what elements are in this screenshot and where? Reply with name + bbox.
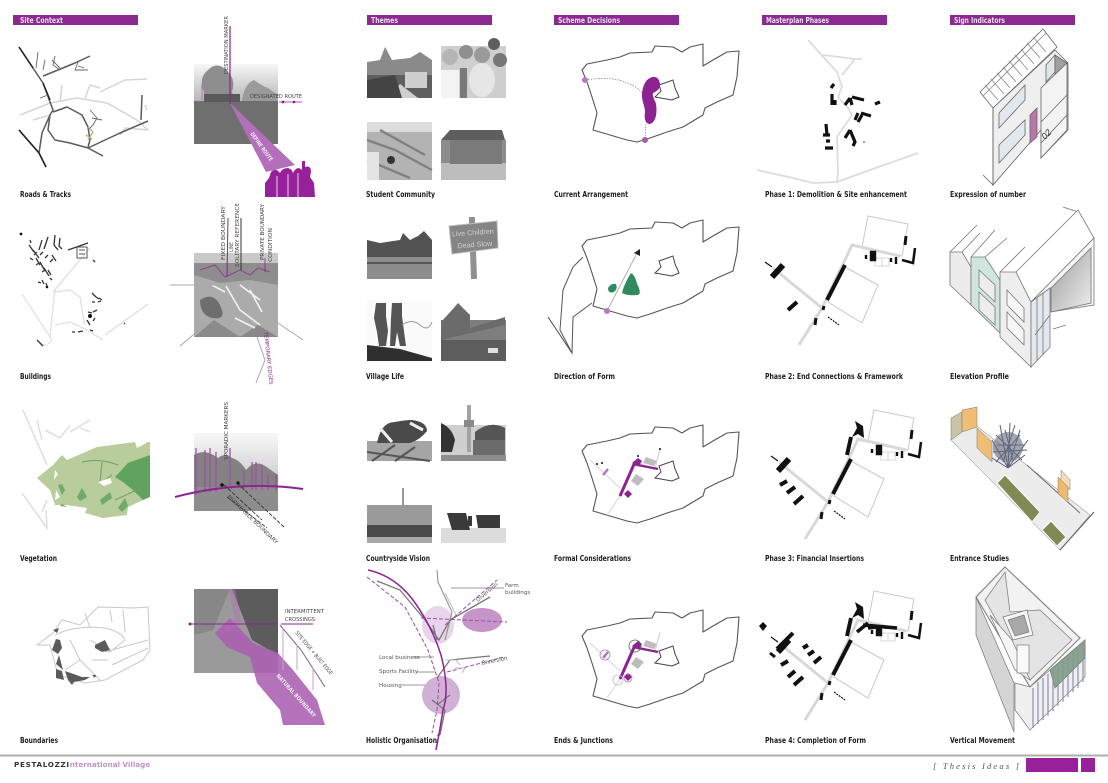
plan: phase 4 completion of form [759, 591, 921, 720]
diagram: direction of form [548, 220, 739, 353]
caption: elevation profile: Elevation Profile [950, 372, 1009, 381]
caption: boundaries: Boundaries [20, 736, 58, 745]
caption: buildings: Buildings [20, 372, 51, 381]
photo: festival crowd [367, 122, 432, 180]
map: vegetation [22, 410, 150, 528]
caption: holistic organisation: Holistic Organisation [366, 736, 437, 745]
isometric: expression of number [980, 29, 1068, 185]
photo: brick building [441, 130, 506, 180]
diagram: holistic organisation: Local business [379, 655, 420, 661]
photo: designated route with crowd: DESTINATION MARKER [224, 16, 230, 74]
icon: road sign Live Children Dead Slow: Dead Slow [457, 239, 493, 250]
photo: natural boundary and crossings [188, 589, 333, 725]
dotted paths [585, 78, 646, 140]
annotation lines [402, 588, 504, 685]
plan: phase 1 demolition and site enhancement [757, 40, 918, 183]
caption: entrance studies: Entrance Studies [950, 554, 1009, 563]
tree [992, 423, 1028, 468]
photo: smiling group [441, 38, 507, 98]
footer rule [0, 754, 1108, 756]
photo: designated route with crowd: DEFINE ROUTE [248, 132, 273, 163]
roof [980, 29, 1057, 108]
photo: aerial view with boundary annotations: SOLITARY REFERENCE [235, 203, 241, 267]
photo: aerial view with boundary annotations: TEMPORARY EDGES [262, 331, 274, 385]
photo: sporadic markers and permeable boundary: SPORADIC MARKERS [224, 402, 230, 460]
photo: natural boundary and crossings: NATURAL BOUNDARY [275, 673, 317, 720]
photo: sporadic markers and permeable boundary: PERMEABLE BOUNDARY [226, 494, 279, 546]
diagram: holistic organisation: Diversion [475, 582, 500, 604]
diagram: ends and junctions [582, 610, 739, 708]
marker line [229, 26, 231, 104]
photo: cattle [441, 513, 506, 543]
heading: Masterplan Phases: Masterplan Phases [766, 15, 829, 25]
diagram: current arrangement [582, 44, 739, 143]
photo: aerial view with boundary annotations [170, 203, 303, 385]
caption: ends and junctions: Ends & Junctions [554, 736, 613, 745]
heading: Site Context [13, 15, 138, 25]
boundary marker lines [227, 218, 228, 277]
heading: Site Context: Site Context [20, 15, 63, 25]
photo: countryside field [367, 488, 432, 543]
natural boundary river [215, 618, 325, 725]
site edge line [280, 625, 325, 687]
photo: sporadic markers and permeable boundary [175, 402, 303, 546]
caption: student community: Student Community [366, 190, 436, 199]
photo: natural boundary and crossings: SITE EDGE + BUILT EDGE [293, 630, 333, 676]
heading: Sign Indicators [950, 15, 1075, 25]
diagram: holistic organisation [367, 570, 530, 750]
photo: natural boundary and crossings: INTERMITTENT [285, 609, 325, 615]
caption: countryside vision: Countryside Vision [366, 554, 430, 563]
door [1030, 108, 1037, 143]
isometric: expression of number: 02 [1039, 127, 1053, 141]
crossing arrow [190, 623, 313, 625]
diagram: formal considerations [582, 425, 739, 523]
photo: designated route with crowd [194, 16, 315, 197]
caption: phase 2: Phase 2: End Connections & Framework [765, 372, 904, 381]
map: roads and tracks [19, 47, 148, 167]
photo: aerial view with boundary annotations: CONDITION [268, 228, 274, 262]
caption: vegetation: Vegetation [20, 554, 57, 563]
map: buildings [20, 233, 148, 346]
photo: natural boundary and crossings: CROSSINGS [285, 617, 315, 623]
permeable dashed lines [224, 483, 285, 528]
skylight [1003, 610, 1033, 640]
caption: expression of number: Expression of number [950, 190, 1026, 199]
caption: formal considerations: Formal Considerations [554, 554, 631, 563]
map: boundaries [37, 607, 150, 685]
footer label: Thesis Ideas: [ Thesis Ideas ] [933, 761, 1019, 771]
arc boundary [175, 486, 303, 497]
footer colour bar [1026, 758, 1095, 772]
photo: designated route with crowd: DESIGNATED ROUTE [250, 94, 302, 100]
caption: phase 1: Phase 1: Demolition & Site enhancement [765, 190, 907, 199]
isometric: vertical movement [976, 567, 1085, 732]
caption: vertical movement: Vertical Movement [950, 736, 1015, 745]
photo: tower and barn [441, 405, 506, 461]
isometric: entrance studies [951, 407, 1094, 550]
photo: badgers [367, 420, 432, 461]
site roads [377, 581, 490, 735]
caption: village life: Village Life [366, 372, 404, 381]
windows [999, 85, 1025, 128]
heading: Scheme Decisions: Scheme Decisions [558, 15, 620, 25]
caption: direction of form: Direction of Form [554, 372, 615, 381]
caption: phase 4: Phase 4: Completion of Form [765, 736, 866, 745]
diagram: holistic organisation: Sports Facility [379, 669, 419, 675]
heading: Scheme Decisions [554, 15, 679, 25]
route wedge [230, 103, 295, 172]
side wall panel [976, 597, 1014, 732]
diagram: holistic organisation: Farm [505, 583, 519, 589]
photo: morris dancers [367, 300, 432, 361]
photo: student gathering [367, 47, 432, 98]
photo: village church [441, 303, 506, 361]
crowd silhouettes [265, 161, 315, 197]
caption: phase 3: Phase 3: Financial Insertions [765, 554, 864, 563]
plan: phase 2 end connections and framework [765, 216, 915, 345]
photo: aerial view with boundary annotations: LINE [229, 242, 235, 252]
route arrows [279, 101, 302, 103]
heading: Sign Indicators: Sign Indicators [954, 15, 1005, 25]
photo: aerial view with boundary annotations: PRIVATE BOUNDARY [260, 203, 266, 260]
isometric: elevation profile [950, 207, 1094, 367]
main route [368, 570, 446, 750]
plan: phase 3 financial insertions [771, 410, 921, 539]
activity ellipses [422, 606, 454, 644]
icon: road sign Live Children Dead Slow [449, 217, 498, 279]
heading: Themes [367, 15, 492, 25]
icon: road sign Live Children Dead Slow: Live Children [452, 227, 494, 238]
front with fins [1015, 640, 1085, 730]
dashed diversion routes [367, 577, 507, 733]
caption: roads and tracks: Roads & Tracks [20, 190, 71, 199]
photo: village green [367, 231, 432, 279]
facade [993, 50, 1068, 185]
footer title: PESTALOZZInternational Village [14, 760, 150, 769]
diagram: holistic organisation: Diversion [481, 656, 509, 667]
roof plane [1016, 210, 1094, 302]
diagram: holistic organisation: Housing [379, 683, 402, 689]
photo: aerial view with boundary annotations: FIXED BOUNDARY [221, 205, 227, 260]
magenta blob [642, 77, 660, 124]
heading: Themes: Themes [371, 15, 398, 25]
caption: current arrangement: Current Arrangement [554, 190, 628, 199]
diagram: holistic organisation: buildings [505, 590, 530, 596]
